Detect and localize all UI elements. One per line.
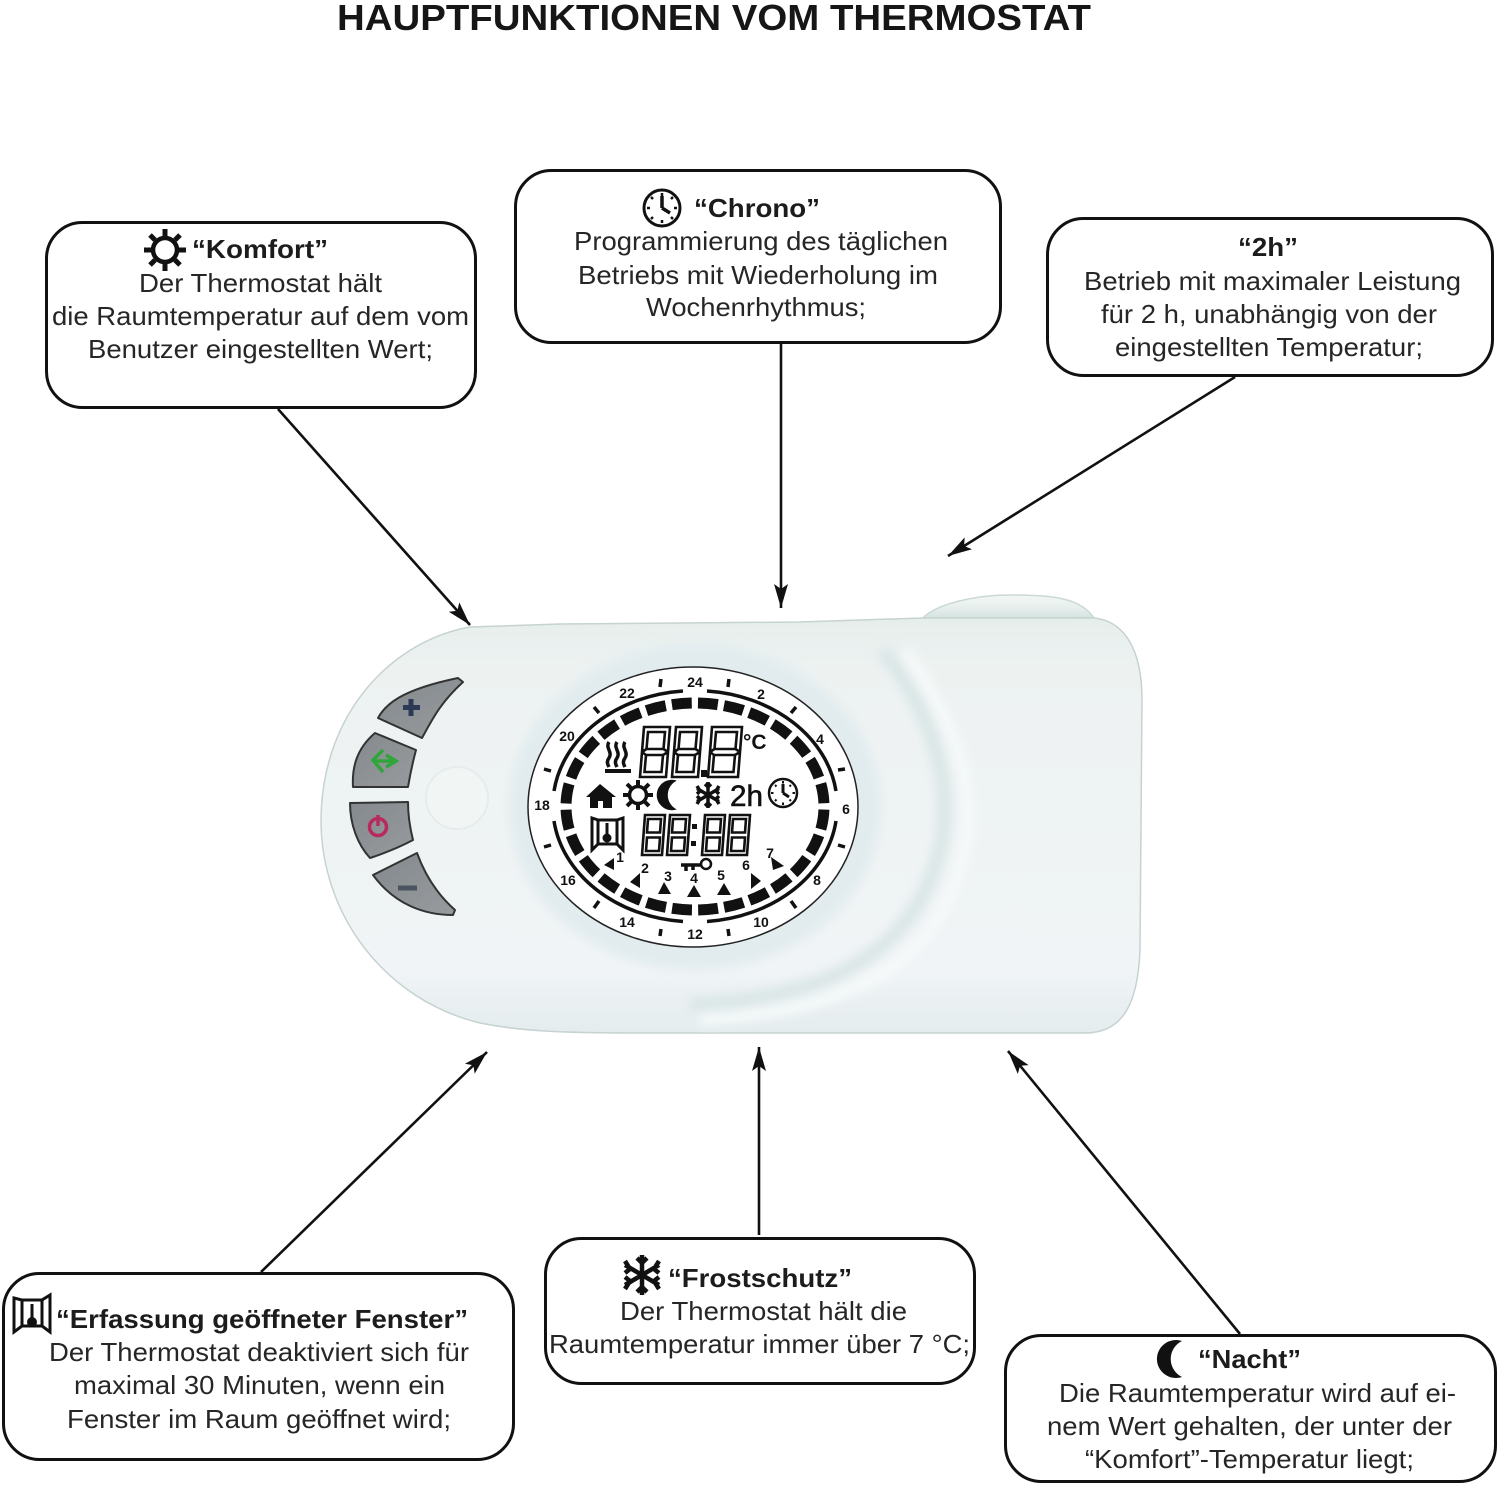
text: Komfort description: “Komfort” (192, 234, 328, 264)
hour numbers: 4 (816, 731, 824, 747)
icon: moon (657, 780, 677, 810)
arrow: 2h (948, 377, 1235, 556)
icon: clock (644, 190, 680, 226)
text: window description (49, 1304, 469, 1434)
hour numbers: 22 (619, 685, 635, 701)
text: night description: nem Wert gehalten, der unter der (1047, 1411, 1452, 1441)
LCD display (528, 667, 858, 947)
text: frost description (549, 1263, 970, 1359)
arrow: Chrono (780, 343, 782, 608)
icon: snowflake (625, 1255, 659, 1295)
panel: Chrono (516, 170, 1000, 342)
text: night description (1047, 1344, 1456, 1474)
text: window description: maximal 30 Minuten, wenn ein (74, 1370, 445, 1400)
degree unit: °C (743, 731, 767, 754)
hour numbers: 12 (687, 926, 703, 942)
icon: clock (769, 779, 797, 807)
time readout 88:88 (642, 815, 750, 855)
button: power (350, 802, 413, 858)
arrow: Komfort (278, 409, 470, 625)
panel: 2h (1048, 218, 1492, 376)
icon: sun (623, 780, 653, 810)
day markers: 3 (664, 868, 672, 884)
icon: open window (592, 818, 623, 850)
thermostat device (321, 595, 1142, 1033)
button: mode (353, 733, 416, 787)
day markers: 4 (690, 870, 698, 886)
hour numbers (534, 674, 850, 942)
text: 2h description (1084, 232, 1461, 362)
day markers: 7 (766, 845, 774, 861)
text: Chrono description: “Chrono” (694, 193, 820, 223)
text: Komfort description: die Raumtemperatur auf dem vom (52, 301, 469, 331)
text: window description: “Erfassung geöffneter Fenster” (56, 1304, 468, 1334)
text: night description: Die Raumtemperatur wird auf ei- (1059, 1378, 1456, 1408)
text: Komfort description (52, 234, 469, 364)
text: Chrono description (574, 193, 948, 322)
icon: moon (1157, 1340, 1182, 1378)
hour numbers: 2 (757, 686, 765, 702)
hour ticks (544, 679, 845, 936)
text: 2h description: Betrieb mit maximaler Leistung (1084, 266, 1461, 296)
text: Chrono description: Betriebs mit Wiederholung im (578, 260, 938, 290)
icon: snowflake (697, 782, 719, 808)
hour numbers: 18 (534, 797, 550, 813)
icon: key (681, 859, 711, 871)
text: frost description: “Frostschutz” (668, 1263, 852, 1293)
text: Komfort description: Der Thermostat hält (139, 268, 383, 298)
icon: house (586, 784, 616, 808)
arrow: frost (758, 1047, 760, 1235)
hour numbers: 16 (560, 872, 576, 888)
text: 2h description: “2h” (1238, 232, 1298, 262)
day markers (604, 845, 784, 897)
icon: sun (144, 229, 186, 271)
arrow: window detection (261, 1052, 487, 1272)
panel: Nacht (1006, 1336, 1496, 1482)
panel: Komfort (46, 222, 476, 408)
device body (321, 618, 1142, 1033)
hour numbers: 8 (813, 872, 821, 888)
panel: Erfassung geöffneter Fenster (4, 1274, 514, 1460)
text: night description: “Komfort”-Temperatur liegt; (1085, 1444, 1414, 1474)
day markers: 5 (717, 867, 725, 883)
hour numbers: 24 (687, 674, 703, 690)
thick segment ring (566, 703, 824, 910)
2h label: 2h (730, 780, 763, 813)
text: night description: “Nacht” (1198, 1344, 1301, 1374)
icon: heating (605, 742, 631, 771)
hour numbers: 10 (753, 914, 769, 930)
arrow: night (1008, 1051, 1240, 1334)
text: 2h description: eingestellten Temperatur; (1115, 332, 1423, 362)
thin ring arcs (554, 691, 836, 922)
panel: Frostschutz (546, 1238, 974, 1384)
text: 2h description: für 2 h, unabhängig von der (1101, 299, 1437, 329)
temperature readout 88.8 (640, 727, 742, 777)
text: Komfort description: Benutzer eingestellten Wert; (88, 334, 433, 364)
button: plus (378, 678, 463, 738)
center button (426, 767, 488, 829)
hour numbers: 20 (559, 728, 575, 744)
body shading (480, 640, 1140, 1030)
day markers: 6 (742, 857, 750, 873)
text: Chrono description: Wochenrhythmus; (646, 292, 866, 322)
text: frost description: Der Thermostat hält die (620, 1296, 907, 1326)
text: Chrono description: Programmierung des täglichen (574, 226, 948, 256)
text: window description: Der Thermostat deaktiviert sich für (49, 1337, 469, 1367)
button: minus (373, 853, 455, 915)
text: window description: Fenster im Raum geöffnet wird; (67, 1404, 451, 1434)
day markers: 2 (641, 860, 649, 876)
day markers: 1 (616, 849, 624, 865)
knob (922, 595, 1094, 619)
icon: open window (14, 1295, 50, 1332)
text: frost description: Raumtemperatur immer über 7 °C; (549, 1329, 970, 1359)
hour numbers: 6 (842, 801, 850, 817)
hour numbers: 14 (619, 914, 635, 930)
